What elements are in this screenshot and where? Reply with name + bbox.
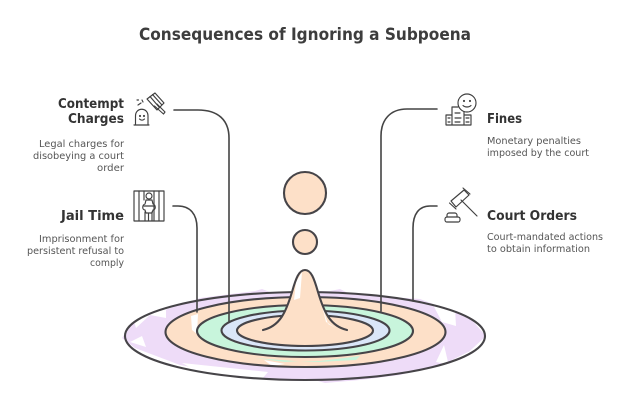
description: court orders: to obtain information [487, 244, 590, 255]
block: court orders [487, 209, 603, 255]
description: jail time: persistent refusal to [27, 246, 124, 257]
ring: inner [237, 315, 373, 346]
icon: gavel and ghost [134, 93, 165, 125]
description: fines: imposed by the court [487, 148, 589, 159]
heading: fines: Fines [487, 112, 522, 127]
block: jail time [27, 209, 124, 269]
ring: blue [222, 310, 390, 350]
description: court orders: Court-mandated actions [487, 232, 603, 243]
ripple diagram [122, 270, 486, 383]
heading: contempt charges [58, 97, 124, 127]
description: fines [487, 136, 589, 159]
heading: court orders: Court Orders [487, 209, 577, 224]
icon: person behind bars [134, 191, 164, 221]
icon: gavel and block [445, 188, 477, 222]
peak outline [263, 270, 347, 330]
small droplet [293, 230, 317, 254]
description: jail time: comply [90, 258, 124, 269]
connector: fines [381, 109, 437, 311]
description: contempt charges: Legal charges for [39, 139, 124, 150]
ring: orange [166, 297, 446, 367]
heading: contempt charges: Contempt [58, 97, 124, 112]
block: fines [487, 112, 589, 159]
large droplet [284, 172, 326, 214]
connector: jail time [173, 206, 197, 312]
central peak [263, 270, 347, 340]
heading: jail time: Jail Time [60, 209, 124, 224]
heading: contempt charges: Charges [68, 112, 124, 127]
description: contempt charges: order [97, 163, 124, 174]
block: contempt charges [33, 97, 124, 174]
connector: court orders [413, 206, 437, 301]
description: jail time: Imprisonment for [39, 234, 124, 245]
description: contempt charges [33, 139, 124, 174]
description: contempt charges: disobeying a court [33, 151, 124, 162]
connector: contempt charges [174, 110, 229, 322]
ring: outer purple [122, 289, 486, 383]
description: fines: Monetary penalties [487, 136, 581, 147]
description: jail time [27, 234, 124, 269]
icon: smiley and documents [446, 94, 476, 125]
description: court orders [487, 232, 603, 255]
title: Consequences of Ignoring a Subpoena [139, 25, 471, 45]
ring: green [197, 305, 413, 357]
peak highlight [294, 272, 336, 328]
